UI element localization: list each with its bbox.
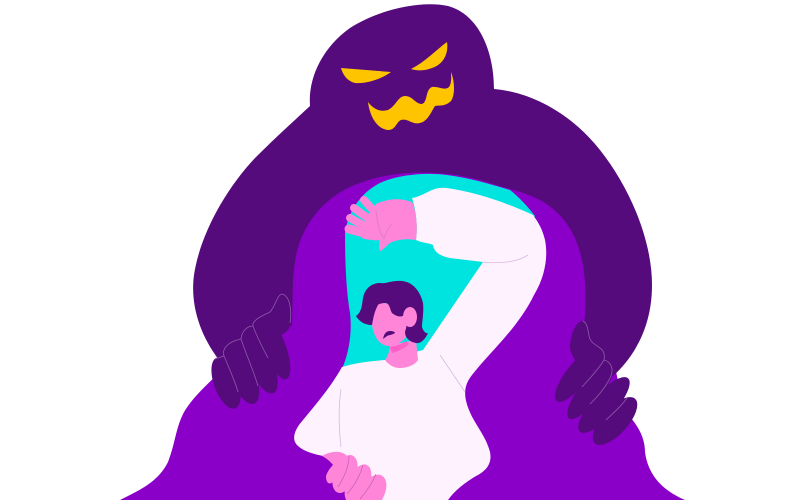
right eye (411, 42, 447, 70)
purple shadow blob (120, 165, 685, 500)
ear (403, 307, 417, 327)
sweater (294, 188, 546, 500)
person (294, 188, 546, 500)
fingers (349, 200, 380, 236)
raised hand (349, 199, 417, 251)
monster face (341, 42, 454, 130)
sweater fold lines (339, 255, 528, 447)
left eye (341, 68, 391, 83)
open mouth (383, 331, 395, 339)
lower hand (322, 451, 392, 500)
jagged mouth (368, 72, 454, 130)
monster body (193, 4, 652, 376)
palm (362, 199, 417, 251)
hair (356, 281, 428, 343)
teal background panel (342, 174, 535, 370)
neck (385, 340, 418, 368)
monster left hand (205, 294, 297, 412)
face (372, 303, 411, 346)
collar shadow (390, 341, 409, 353)
monster right hand (548, 321, 645, 452)
